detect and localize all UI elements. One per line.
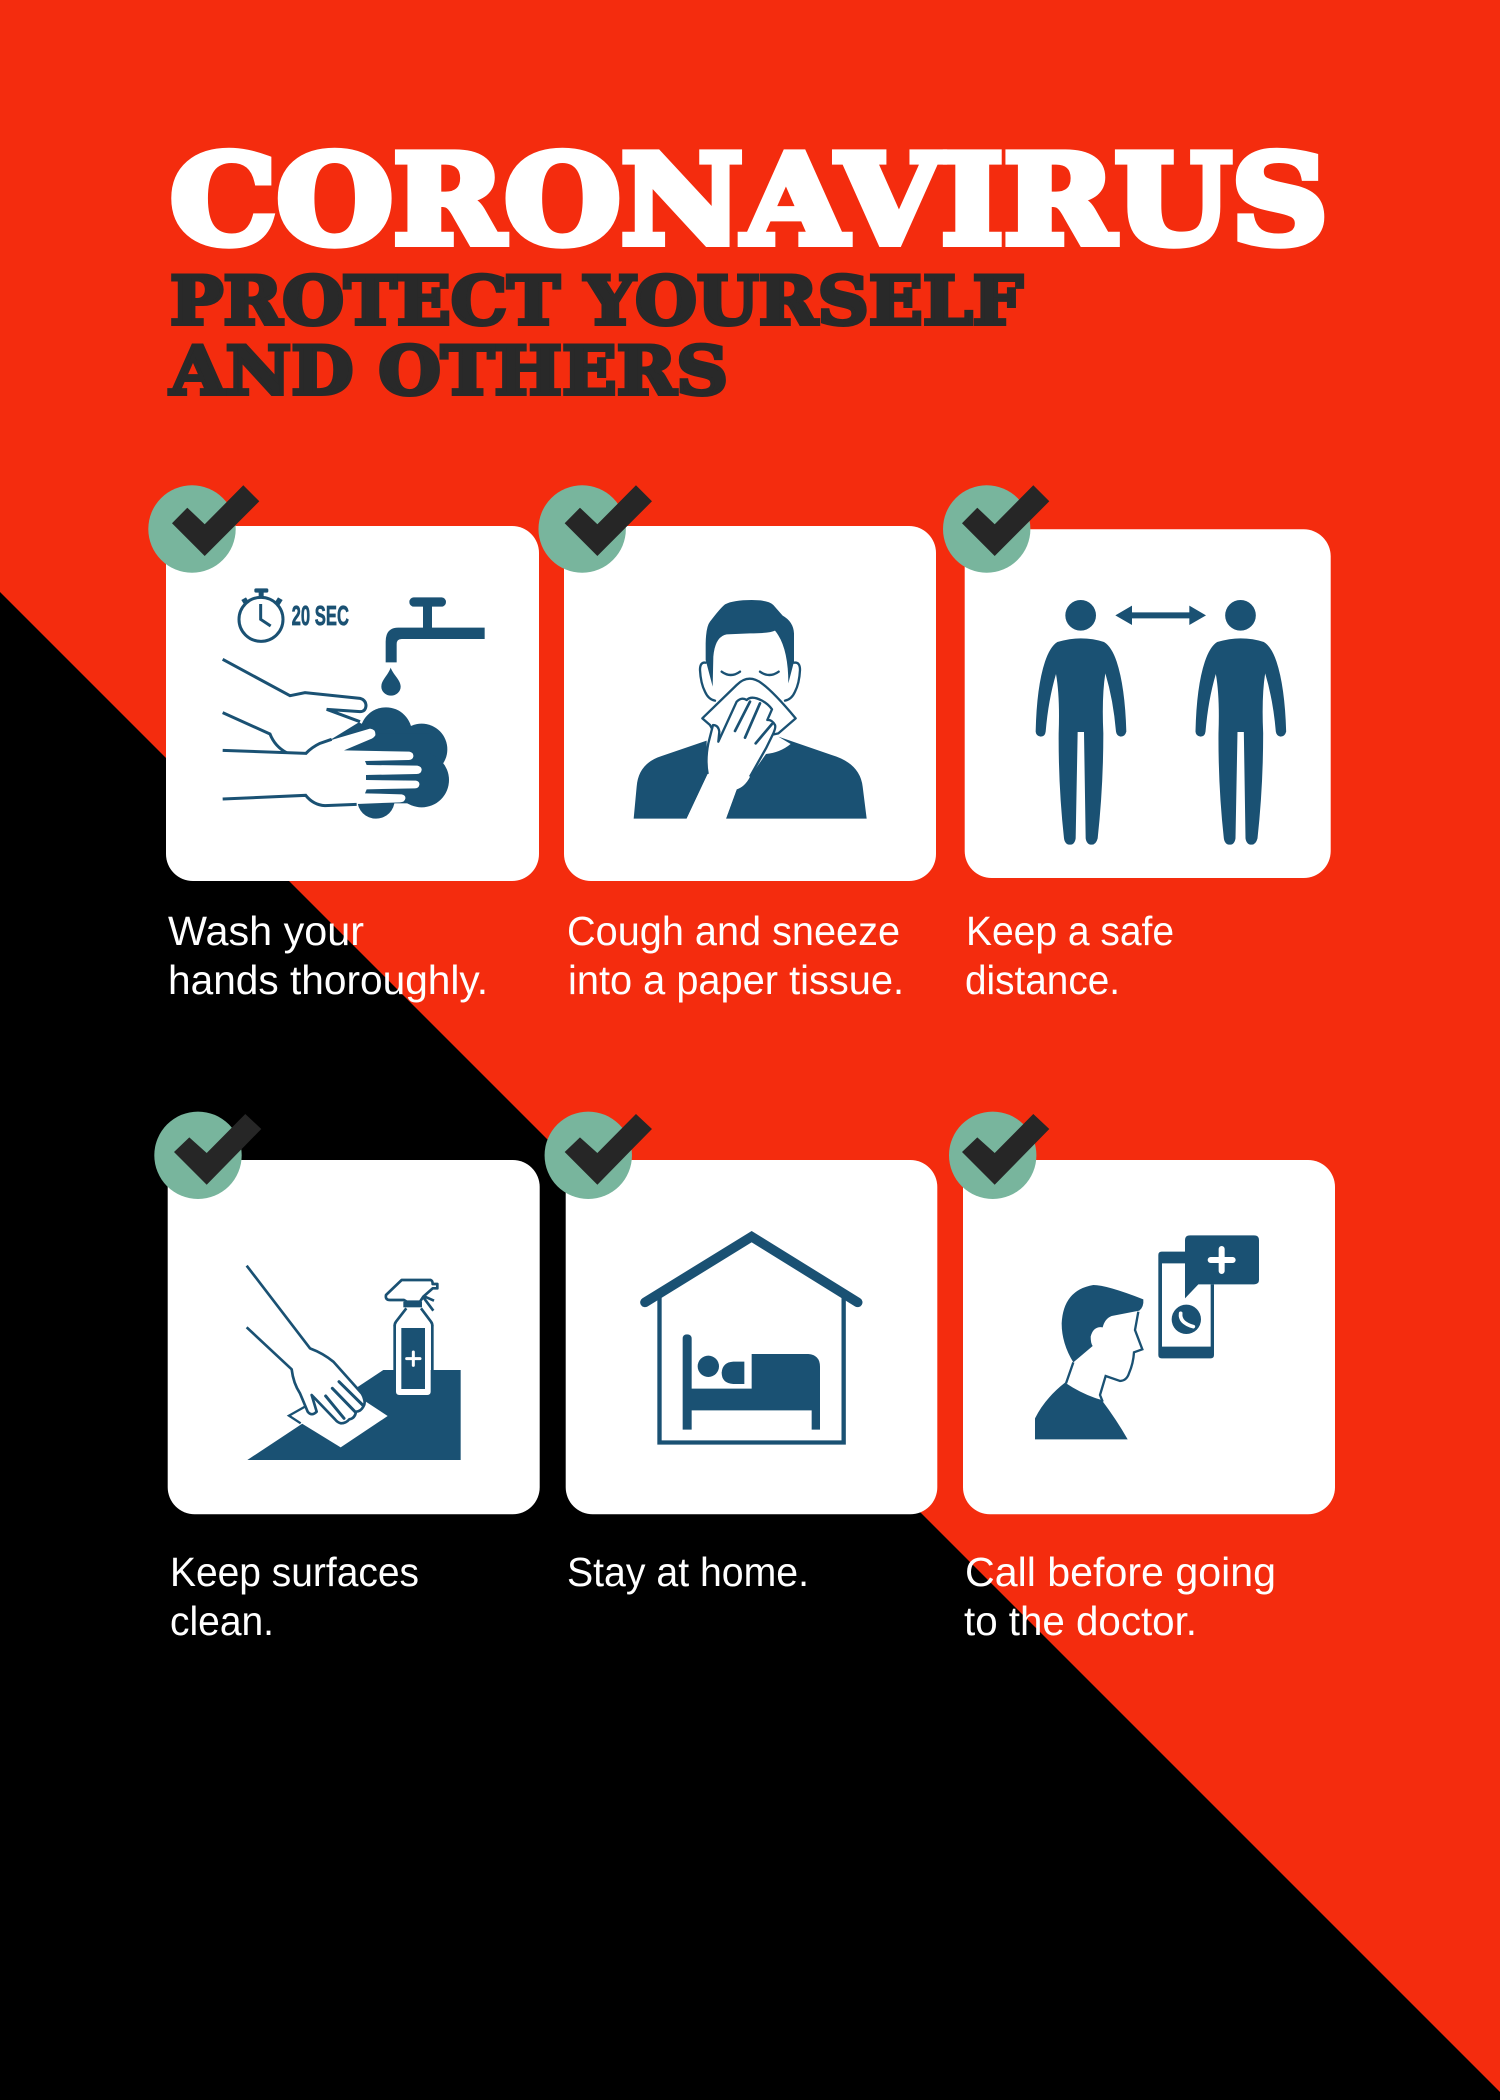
icon: wiping surface and spray bottle <box>247 1266 461 1460</box>
label: wash hands: Wash your <box>168 908 364 954</box>
check badge <box>538 485 652 573</box>
double arrow <box>1115 606 1206 625</box>
check badge <box>943 485 1049 573</box>
panel: clean surfaces <box>154 1112 540 1644</box>
icon: person and phone <box>1035 1235 1259 1439</box>
label: cough: into a paper tissue. <box>568 957 904 1003</box>
label: wash hands: hands thoroughly. <box>168 957 488 1003</box>
card: home <box>566 1160 937 1514</box>
icon: man sneezing into tissue <box>634 600 867 819</box>
label: cough <box>567 908 904 1003</box>
label: wash hands <box>168 908 488 1003</box>
label: distance: distance. <box>965 957 1120 1003</box>
panel: call the doctor <box>949 1112 1335 1644</box>
check badge <box>949 1112 1049 1199</box>
label: home: Stay at home. <box>567 1549 809 1595</box>
label: distance: Keep a safe <box>966 908 1174 954</box>
person left <box>1036 600 1126 845</box>
card: wash hands <box>166 526 539 881</box>
label: doctor: to the doctor. <box>964 1598 1197 1644</box>
icon: wash hands: 20 SEC <box>292 600 349 631</box>
icon: wash hands <box>223 588 485 819</box>
label: doctor <box>964 1549 1276 1644</box>
label: surfaces <box>170 1549 419 1644</box>
panel: wash hands <box>148 485 539 1003</box>
icon: house with bed <box>645 1237 858 1442</box>
black diagonal background <box>0 592 1500 2100</box>
check badge <box>545 1112 652 1199</box>
icon: two people with arrow <box>1036 600 1286 845</box>
panel: stay at home <box>545 1112 937 1595</box>
card: doctor <box>963 1160 1335 1514</box>
title: CORONAVIRUS <box>170 129 1328 273</box>
label: distance <box>965 908 1174 1003</box>
label: surfaces: clean. <box>170 1598 274 1644</box>
card: distance <box>965 529 1331 878</box>
label: surfaces: Keep surfaces <box>170 1549 419 1595</box>
label: doctor: Call before going <box>965 1549 1276 1595</box>
subtitle: PROTECT YOURSELF <box>170 262 1023 340</box>
panel: cough and sneeze <box>538 485 936 1003</box>
subtitle: AND OTHERS <box>169 332 728 410</box>
panel: safe distance <box>943 485 1331 1003</box>
card: cough <box>564 526 936 881</box>
person right <box>1195 600 1286 845</box>
card: surfaces <box>168 1160 540 1514</box>
subtitle <box>169 262 1023 410</box>
check badge <box>148 485 259 573</box>
check badge <box>154 1112 261 1199</box>
label: cough: Cough and sneeze <box>567 908 900 954</box>
